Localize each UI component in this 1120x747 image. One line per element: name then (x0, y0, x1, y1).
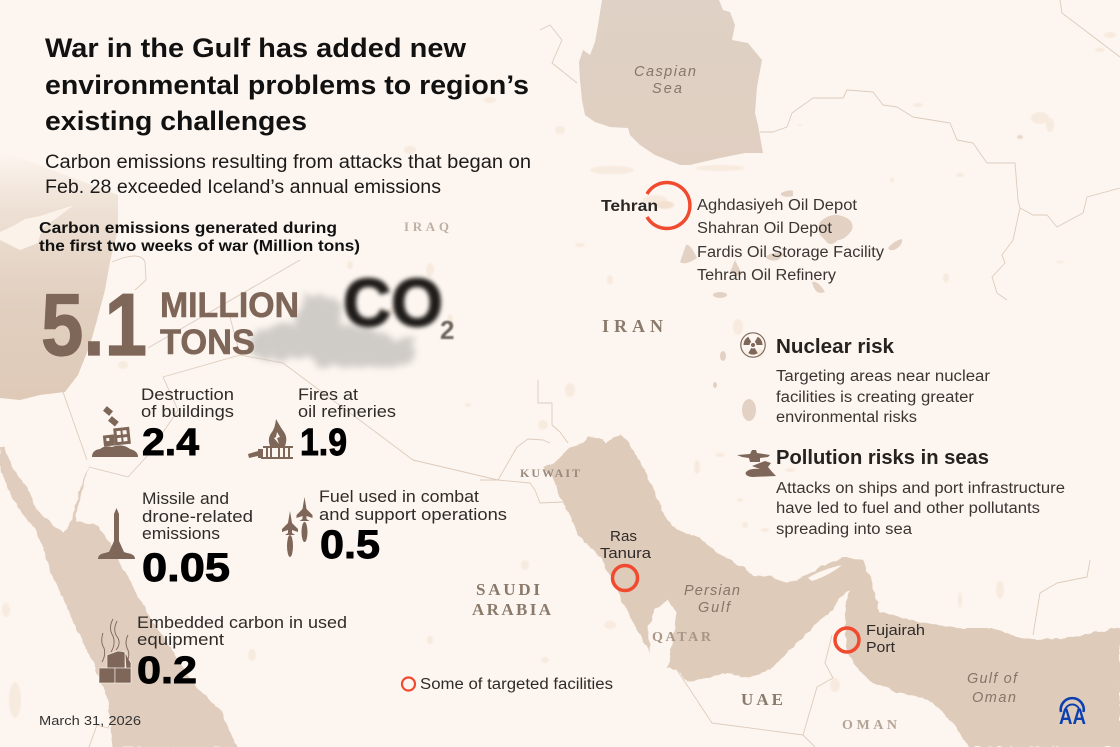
legend: targeted facilities: Some of targeted facilities (420, 676, 613, 693)
logo: Anadolu Agency: AA (1059, 704, 1086, 729)
marker: Ras Tanura (600, 528, 652, 590)
stat: missile and drone emissions: Missile and (142, 490, 229, 508)
stat: fuel in combat and support: and support operations (319, 506, 507, 524)
stat: fuel in combat and support (319, 488, 507, 567)
panel: pollution risks in seas: have led to fuel and other pollutants (776, 500, 1040, 517)
marker: Ras Tanura: Tanura (600, 545, 652, 562)
stat: embedded carbon (137, 614, 347, 692)
list: Tehran facilities (697, 197, 884, 284)
icon: rocket launch (98, 508, 135, 559)
stat: fires at oil refineries: oil refineries (298, 403, 396, 421)
chart heading: the first two weeks of war (Million tons) (39, 238, 360, 255)
stat: fires at oil refineries: Fires at (298, 386, 358, 404)
marker: Tehran (601, 182, 690, 229)
title (45, 33, 529, 136)
map labels: countries: IRAQ (404, 219, 449, 234)
map labels: countries: QATAR (652, 630, 712, 645)
list: Tehran facilities: Shahran Oil Depot (697, 220, 833, 237)
map labels: seas: Gulf (698, 600, 732, 616)
stat: fuel in combat and support: Fuel used in combat (319, 488, 479, 506)
big number: 5.1 million tons: MILLION (160, 286, 299, 325)
map labels: countries: KUWAIT (520, 466, 580, 480)
list: Tehran facilities: Fardis Oil Storage Facility (697, 244, 884, 261)
map: lakes and salt flats (680, 190, 902, 421)
marker: Fujairah Port (835, 622, 925, 656)
map: Caspian Sea (579, 0, 763, 165)
CO2 label: CO (343, 265, 443, 341)
map labels: countries: UAE (741, 690, 783, 709)
stat: missile and drone emissions: drone-related (142, 508, 253, 526)
map labels: countries: OMAN (842, 718, 897, 733)
stat: embedded carbon: equipment (137, 631, 224, 649)
date: March 31, 2026 (39, 713, 141, 728)
stat: embedded carbon: Embedded carbon in used (137, 614, 347, 632)
map: Persian Gulf and Gulf of Oman (543, 435, 1120, 747)
icon: fighter jets (282, 497, 312, 557)
list: Tehran facilities: Tehran Oil Refinery (697, 267, 836, 284)
panel: pollution risks in seas: Attacks on ships and port infrastructure (776, 480, 1065, 497)
map labels: countries: IRAN (602, 316, 663, 336)
stat: destruction of buildings: 2.4 (142, 422, 199, 464)
chart heading (39, 220, 360, 255)
panel: pollution risks in seas (776, 447, 1065, 538)
stat: missile and drone emissions (142, 490, 253, 590)
icon: collapsed building (92, 406, 138, 457)
stat: destruction of buildings (141, 386, 234, 464)
panel: nuclear risk: Nuclear risk (776, 336, 895, 358)
map: Cyprus (0, 205, 74, 250)
map labels: seas: Caspian (634, 64, 696, 80)
map labels: seas: Persian (684, 583, 740, 599)
big number: 5.1 million tons: 5.1 (41, 275, 147, 374)
panel: nuclear risk: facilities is creating greater (776, 389, 974, 406)
map: Qeshm island (808, 565, 842, 581)
marker: Fujairah Port: Port (866, 639, 896, 656)
icon: ship and oil slick (737, 450, 776, 477)
title: War in the Gulf has added new (45, 33, 467, 63)
marker: Fujairah Port: Fujairah (866, 622, 925, 639)
marker: Ras Tanura: Ras (610, 528, 637, 545)
map labels: seas: Gulf of (967, 671, 1019, 687)
map labels: seas (634, 64, 1019, 706)
icon: refinery fire (248, 419, 293, 459)
stat: destruction of buildings: of buildings (141, 403, 234, 421)
map labels: countries (404, 219, 897, 733)
CO2 label: 2 (440, 315, 454, 345)
smoke cloud (247, 294, 418, 367)
map: Mediterranean Sea (0, 150, 118, 400)
marker: Tehran: Tehran (601, 198, 658, 215)
big number: 5.1 million tons: TONS (160, 323, 255, 362)
stat: missile and drone emissions: 0.05 (142, 546, 230, 590)
panel: nuclear risk: environmental risks (776, 409, 917, 426)
stat: destruction of buildings: Destruction (141, 386, 234, 404)
subtitle: Feb. 28 exceeded Iceland’s annual emissions (45, 177, 441, 198)
panel: pollution risks in seas: spreading into sea (776, 521, 912, 538)
stat: missile and drone emissions: emissions (142, 525, 220, 543)
panel: pollution risks in seas: Pollution risks in seas (776, 447, 989, 469)
map labels: seas: Oman (972, 690, 1016, 706)
chart heading: Carbon emissions generated during (39, 220, 337, 237)
subtitle (45, 152, 531, 198)
list: Tehran facilities: Aghdasiyeh Oil Depot (697, 197, 858, 214)
map labels: seas: Sea (652, 81, 682, 97)
stat: embedded carbon: 0.2 (137, 650, 197, 692)
map labels: countries: ARABIA (472, 600, 552, 619)
stat: fires at oil refineries: 1.9 (300, 422, 347, 464)
title: environmental problems to region’s (45, 70, 529, 100)
big number: 5.1 million tons (41, 275, 299, 374)
icon: smoking crates (99, 619, 131, 683)
map labels: countries: SAUDI (476, 580, 540, 599)
icon: radiation (741, 333, 765, 357)
stat: fuel in combat and support: 0.5 (320, 523, 380, 567)
panel: nuclear risk: Targeting areas near nuclear (776, 368, 990, 385)
title: existing challenges (45, 106, 307, 136)
stat: fires at oil refineries (298, 386, 396, 464)
subtitle: Carbon emissions resulting from attacks that began on (45, 152, 531, 173)
map: Red Sea (0, 447, 237, 747)
panel: nuclear risk (776, 336, 990, 426)
